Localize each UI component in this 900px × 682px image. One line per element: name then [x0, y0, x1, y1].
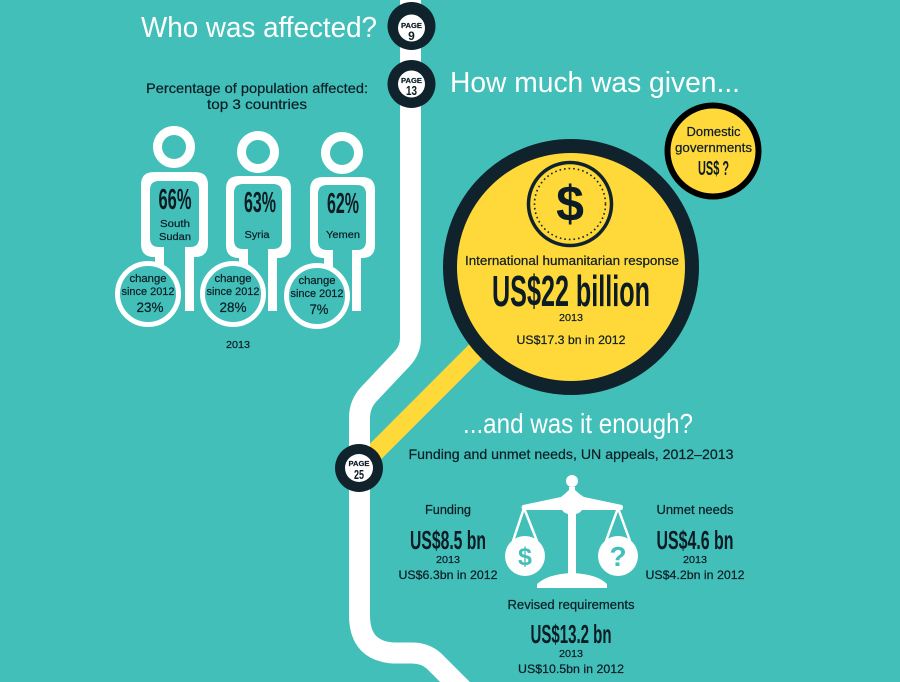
page marker 9: PAGE — [401, 21, 422, 30]
funding figures: Funding — [425, 503, 471, 517]
person: South Sudan: Sudan — [159, 231, 191, 243]
person: Yemen: Yemen — [326, 229, 360, 241]
unmet needs figures: US$4.2bn in 2012 — [646, 568, 745, 582]
person: Yemen: since 2012 — [290, 288, 344, 300]
page marker 25: 25 — [354, 467, 364, 482]
person: South Sudan: 66% — [158, 184, 192, 216]
person: South Sudan: change — [130, 273, 166, 285]
panel: international humanitarian response: 2013 — [559, 312, 583, 324]
left pan with dollar — [505, 536, 545, 576]
unmet needs figures: US$4.6 bn — [656, 525, 734, 555]
person: Syria: 28% — [220, 299, 246, 315]
heading: and was it enough: ...and was it enough? — [463, 408, 693, 439]
yellow connector line — [365, 342, 485, 462]
icon: dollar coin: $ — [556, 176, 584, 232]
revised requirements figures: 2013 — [559, 648, 583, 660]
panel: international humanitarian response — [450, 146, 692, 388]
subheading: funding and unmet needs: Funding and unmet needs, UN appeals, 2012–2013 — [408, 446, 734, 462]
person: South Sudan: South — [160, 218, 190, 230]
funding figures: 2013 — [436, 554, 460, 566]
callout: domestic governments: US$ ? — [698, 158, 729, 180]
icon: dollar coin — [528, 162, 612, 246]
funding figures — [398, 503, 498, 582]
person: Syria — [202, 136, 291, 324]
panel: international humanitarian response: US$17.3 bn in 2012 — [516, 333, 626, 347]
funding figures: US$6.3bn in 2012 — [398, 568, 498, 582]
callout: domestic governments: governments — [675, 141, 752, 155]
person: South Sudan: 23% — [136, 299, 164, 315]
page marker 25: PAGE — [348, 459, 370, 468]
person: Syria: change — [214, 273, 252, 285]
heading: how much was given: How much was given... — [450, 67, 740, 99]
page marker 13: 13 — [406, 83, 417, 98]
unmet needs figures — [646, 503, 745, 582]
page marker 9 — [388, 2, 436, 50]
person: South Sudan — [118, 130, 208, 324]
subheading: percentage of population: Percentage of population affected: — [146, 80, 368, 96]
person: Yemen: change — [298, 275, 336, 287]
icon: balance scale: $ — [518, 543, 532, 571]
page marker 13 — [388, 60, 436, 108]
person: Syria: Syria — [244, 229, 270, 241]
page marker 25 — [335, 444, 383, 492]
person: Syria: 63% — [244, 187, 276, 219]
revised requirements figures: US$13.2 bn — [530, 619, 612, 649]
unmet needs figures: Unmet needs — [656, 503, 734, 517]
person: Yemen — [286, 136, 375, 326]
icon: balance scale: ? — [609, 541, 627, 572]
subheading: percentage of population: top 3 countries — [207, 96, 307, 112]
person: Yemen: 62% — [327, 188, 359, 220]
panel: international humanitarian response: International humanitarian response — [465, 253, 679, 268]
revised requirements figures: US$10.5bn in 2012 — [518, 662, 624, 676]
funding figures: US$8.5 bn — [410, 525, 486, 555]
person: Syria: since 2012 — [206, 286, 260, 298]
person: South Sudan: since 2012 — [122, 286, 174, 298]
subheading: percentage of population — [146, 80, 368, 112]
unmet needs figures: 2013 — [683, 554, 707, 566]
revised requirements figures — [508, 598, 634, 676]
heading: who was affected: Who was affected? — [141, 12, 377, 44]
person: Yemen: 7% — [310, 301, 328, 317]
year label: 2013 — [226, 339, 250, 351]
page marker 13: PAGE — [401, 76, 422, 85]
revised requirements figures: Revised requirements — [508, 598, 634, 612]
callout: domestic governments: Domestic — [686, 125, 740, 139]
page marker 9: 9 — [408, 29, 415, 43]
callout: domestic governments — [668, 106, 758, 196]
panel: international humanitarian response: US$22 billion — [492, 267, 650, 316]
white route line — [360, 0, 470, 682]
icon: balance scale — [505, 475, 638, 588]
right pan with question mark — [598, 536, 638, 576]
